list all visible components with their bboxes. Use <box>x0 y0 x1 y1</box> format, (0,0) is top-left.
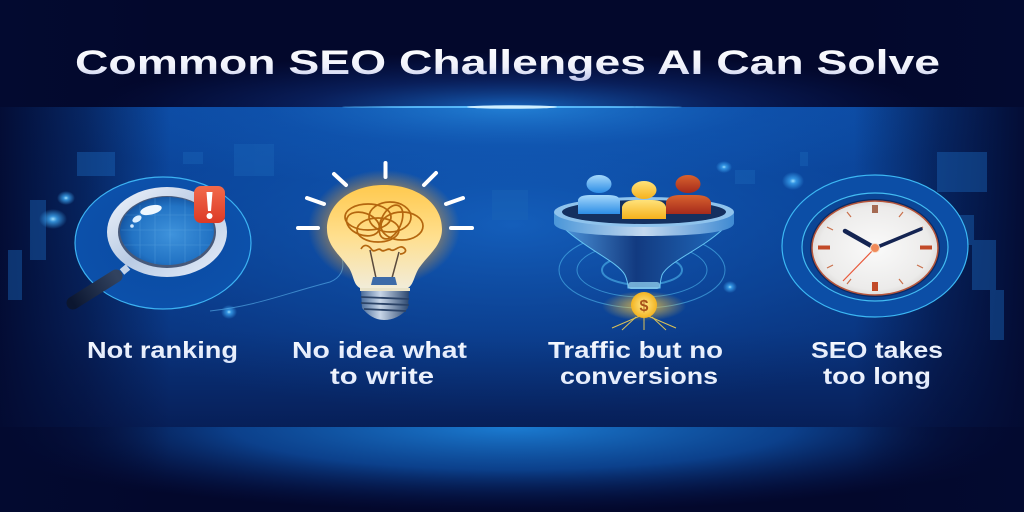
label: no idea what to write: No idea what <box>292 337 467 363</box>
panel: not ranking <box>73 177 251 363</box>
label: not ranking: Not ranking <box>87 337 238 363</box>
panel: no idea what to write <box>292 163 472 389</box>
label: traffic but no conversions: Traffic but no <box>548 337 723 363</box>
icon: clock <box>782 175 968 317</box>
label: no idea what to write: to write <box>330 363 434 389</box>
people <box>578 175 711 219</box>
icon: light bulb with tangled filament <box>298 163 472 320</box>
panel: SEO takes too long <box>782 175 968 389</box>
panel: traffic but no conversions <box>548 175 734 389</box>
label: SEO takes too long: SEO takes <box>811 337 943 363</box>
icon: funnel with people and coin <box>554 175 734 330</box>
icon: funnel with people and coin: $ <box>640 298 649 315</box>
label: traffic but no conversions <box>548 337 723 389</box>
label: SEO takes too long: too long <box>823 363 931 389</box>
title: Common SEO Challenges AI Can Solve <box>75 44 940 82</box>
label: no idea what to write <box>292 337 467 389</box>
label: traffic but no conversions: conversions <box>560 363 718 389</box>
icon: magnifying glass with alert <box>73 177 251 309</box>
label: SEO takes too long <box>811 337 943 389</box>
